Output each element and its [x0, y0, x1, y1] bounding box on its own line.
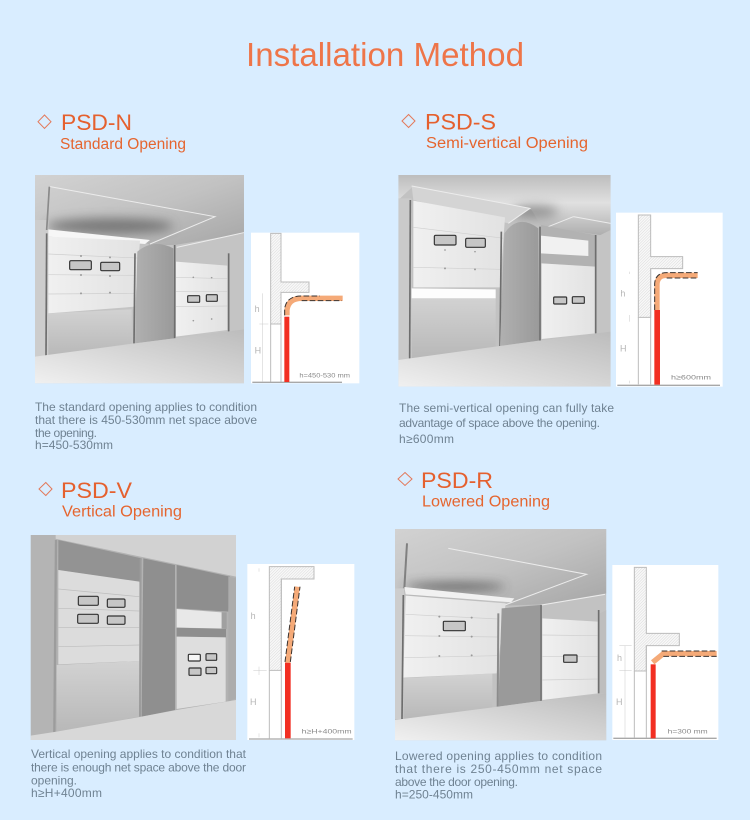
heading: PSD-V: Vertical Opening	[62, 504, 182, 520]
photo: lowered opening doors	[395, 529, 606, 740]
photo: vertical opening doors	[31, 535, 236, 740]
description: Vertical opening applies to condition that	[31, 747, 247, 761]
description	[31, 747, 247, 800]
heading: PSD-N	[38, 110, 186, 153]
heading: PSD-S	[402, 110, 588, 152]
heading: PSD-R: Lowered Opening	[422, 494, 550, 510]
description: the opening.	[35, 426, 97, 440]
description: The standard opening applies to condition	[35, 400, 257, 414]
diagram: lowered opening section: h	[617, 653, 622, 663]
photo: semi-vertical opening doors	[398, 175, 611, 387]
panel: PSD-V vertical opening	[31, 478, 354, 800]
diagram: vertical opening section: h	[251, 611, 256, 621]
heading: PSD-R: PSD-R	[421, 468, 493, 493]
diagram: lowered opening section: H	[616, 697, 622, 707]
description: there is enough net space above the door	[31, 760, 246, 774]
diagram: semi-vertical opening section: H	[620, 344, 626, 354]
description	[35, 400, 257, 452]
diagram: semi-vertical opening section: h≥600mm	[671, 374, 712, 381]
diagram: semi-vertical opening section: h	[620, 289, 625, 299]
diagram: standard opening section	[251, 233, 359, 383]
description	[399, 401, 614, 446]
description: that there is 450-530mm net space above	[35, 413, 257, 427]
diagram: semi-vertical opening section	[616, 213, 723, 387]
description: h≥600mm	[399, 432, 454, 446]
description: Lowered opening applies to condition	[395, 749, 602, 763]
heading: PSD-N: Standard Opening	[60, 136, 186, 153]
description: h=250-450mm	[395, 788, 473, 802]
panel: PSD-N standard opening	[35, 110, 359, 452]
diagram: vertical opening section: H	[250, 697, 256, 707]
heading: PSD-S: PSD-S	[425, 110, 496, 134]
panel: PSD-R lowered opening	[395, 468, 718, 802]
description: above the door opening.	[395, 775, 518, 789]
heading: PSD-R	[398, 468, 550, 510]
diagram: standard opening section: h	[255, 304, 260, 314]
description	[395, 749, 602, 802]
description: advantage of space above the opening.	[399, 416, 600, 430]
description: that there is 250-450mm net space	[395, 762, 602, 776]
description: The semi-vertical opening can fully take	[399, 401, 614, 415]
heading: PSD-V: PSD-V	[61, 478, 132, 503]
heading: PSD-S: Semi-vertical Opening	[426, 135, 588, 152]
description: h=450-530mm	[35, 438, 113, 452]
diagram: standard opening section: H	[255, 345, 261, 355]
diagram: vertical opening section: h≥H+400mm	[302, 728, 352, 735]
description: opening.	[31, 774, 77, 788]
diagram: standard opening section: h=450-530 mm	[299, 373, 350, 380]
diagram: lowered opening section	[612, 565, 718, 740]
heading: PSD-N: PSD-N	[61, 110, 132, 135]
description: h≥H+400mm	[31, 786, 102, 800]
photo: standard opening doors	[35, 175, 244, 383]
panel: PSD-S semi-vertical opening	[398, 110, 723, 446]
title: Installation Method	[246, 36, 524, 73]
diagram: lowered opening section: h=300 mm	[668, 728, 708, 735]
diagram: vertical opening section	[247, 564, 354, 740]
heading: PSD-V	[39, 478, 182, 520]
